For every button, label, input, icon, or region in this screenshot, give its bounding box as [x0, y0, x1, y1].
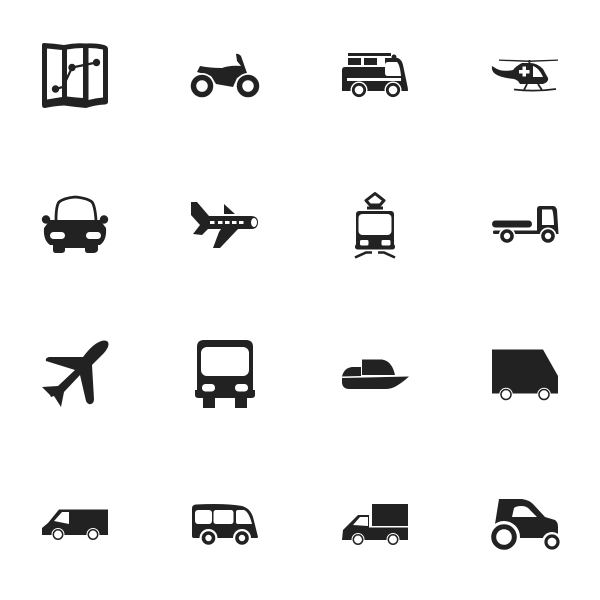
icon: bus front: [195, 340, 255, 408]
icon: flatbed truck: [492, 206, 558, 244]
icon: boat: [342, 360, 409, 389]
icon: folded map: [42, 43, 108, 108]
icon: box truck: [342, 504, 408, 546]
icon: motorcycle: [189, 54, 261, 99]
icon: small car: [488, 499, 562, 553]
icon: minibus: [192, 504, 258, 547]
icon: fire truck: [342, 53, 408, 98]
icon: car front: [42, 197, 108, 253]
icon: delivery van side: [492, 350, 558, 401]
icon: cargo van: [42, 510, 108, 541]
icon: tram: [355, 194, 395, 258]
icon: airplane side view: [191, 202, 258, 248]
icon: medical helicopter: [492, 60, 558, 91]
icon: airplane silhouette: [42, 340, 108, 407]
